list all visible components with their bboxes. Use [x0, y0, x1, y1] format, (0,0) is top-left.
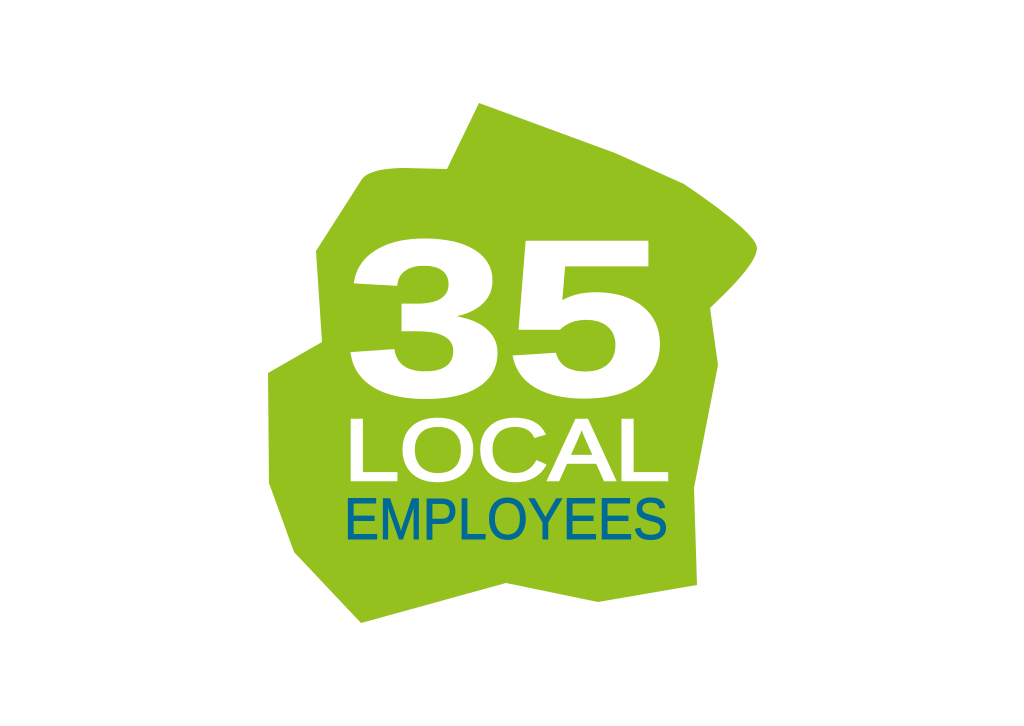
big number: 35: 35 — [346, 195, 666, 443]
heading: LOCAL: LOCAL — [344, 402, 670, 499]
subheading: EMPLOYEES: EMPLOYEES — [344, 487, 668, 552]
panel: green map-shaped badge — [268, 103, 757, 623]
